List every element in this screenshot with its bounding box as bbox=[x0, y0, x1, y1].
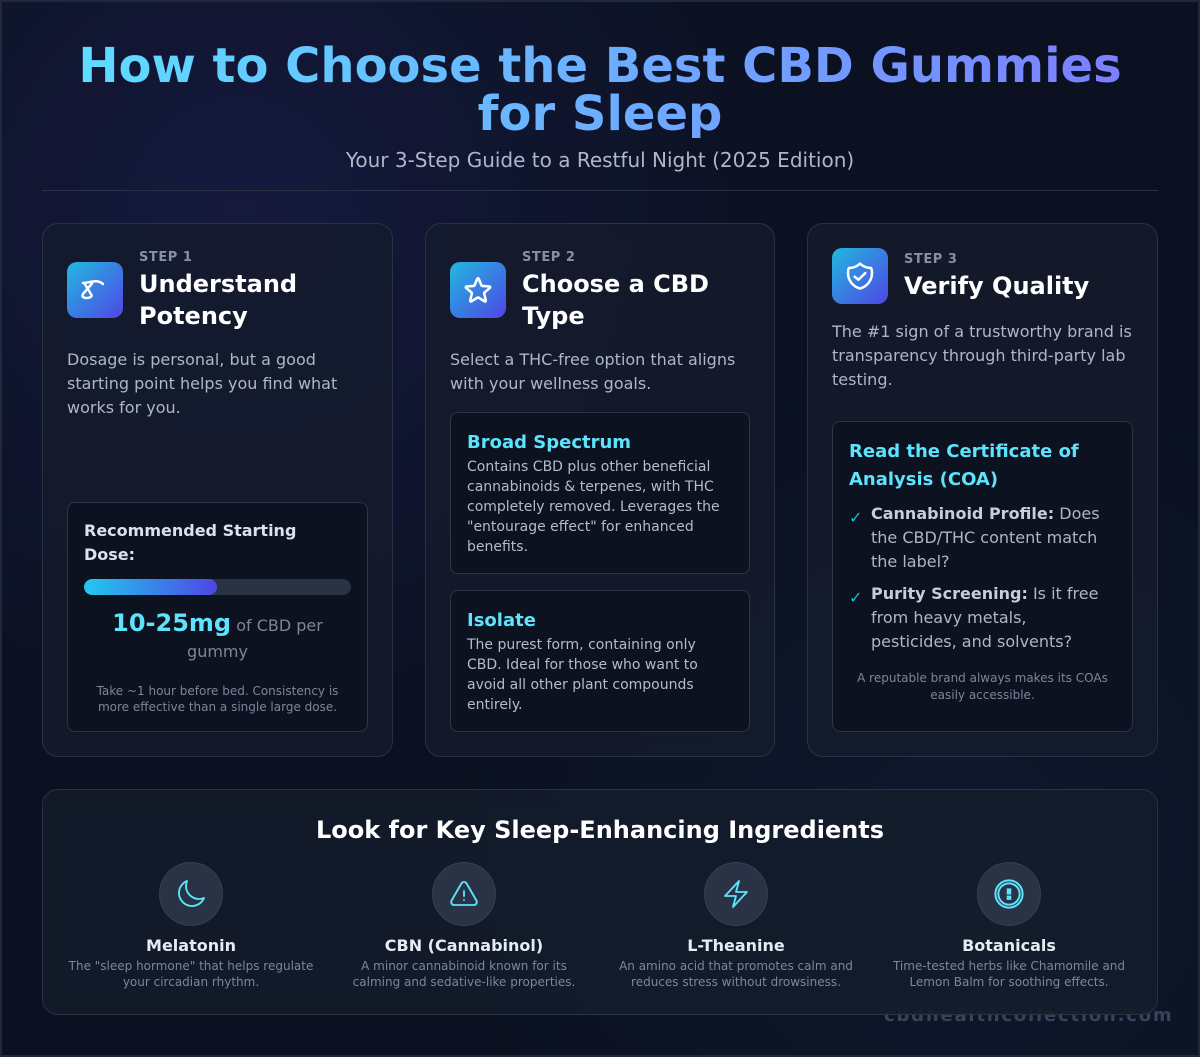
botanicals title: Botanicals bbox=[962, 936, 1056, 955]
CBN text: calming and sedative-like properties. bbox=[353, 975, 575, 989]
dose heading: Recommended Starting bbox=[84, 521, 296, 540]
step 1 description bbox=[67, 350, 337, 417]
step 3 label: STEP 3 bbox=[904, 252, 958, 267]
step 3 description: testing. bbox=[832, 370, 893, 389]
broad spectrum heading: Broad Spectrum bbox=[467, 432, 631, 452]
step 2 heading: Choose a CBD bbox=[522, 270, 709, 298]
icon: warning triangle bbox=[432, 862, 496, 926]
step 2 heading bbox=[522, 270, 709, 330]
checklist item: purity screening: from heavy metals, bbox=[871, 608, 1027, 627]
dose note: Take ~1 hour before bed. Consistency is bbox=[97, 684, 338, 698]
checklist item: cannabinoid profile bbox=[849, 504, 1100, 571]
L-Theanine text bbox=[619, 959, 853, 989]
icon: star bbox=[450, 262, 506, 318]
panel: step 3 bbox=[807, 223, 1158, 757]
checklist item: purity screening bbox=[849, 584, 1098, 651]
COA note bbox=[857, 671, 1108, 702]
COA note: A reputable brand always makes its COAs bbox=[857, 671, 1108, 685]
step 3 description bbox=[832, 322, 1132, 389]
step 1 description: Dosage is personal, but a good bbox=[67, 350, 316, 369]
checklist item: cannabinoid profile: Cannabinoid Profile: Does bbox=[871, 504, 1100, 523]
isolate text bbox=[466, 636, 698, 712]
dose heading bbox=[84, 521, 296, 564]
COA heading: Read the Certificate of bbox=[849, 441, 1079, 462]
melatonin text: your circadian rhythm. bbox=[123, 975, 259, 989]
broad spectrum text bbox=[467, 458, 720, 554]
broad spectrum text: Contains CBD plus other beneficial bbox=[467, 458, 710, 474]
dose note: more effective than a single large dose. bbox=[98, 700, 337, 714]
panel: isolate bbox=[450, 590, 750, 732]
COA note: easily accessible. bbox=[930, 688, 1035, 702]
broad spectrum text: "entourage effect" for enhanced bbox=[467, 518, 694, 534]
title: How to Choose the Best CBD Gummies bbox=[78, 38, 1122, 94]
subtitle: Your 3-Step Guide to a Restful Night (2025 Edition) bbox=[346, 148, 854, 172]
title bbox=[42, 42, 1158, 138]
panel: step 2 bbox=[425, 223, 775, 757]
broad spectrum text: benefits. bbox=[467, 538, 528, 554]
checklist item: cannabinoid profile: ✓ bbox=[849, 508, 862, 527]
dose value: gummy bbox=[187, 642, 248, 661]
step 2 description: Select a THC-free option that aligns bbox=[450, 350, 735, 369]
melatonin text bbox=[68, 959, 313, 989]
icon: dosage bbox=[67, 262, 123, 318]
CBN text: A minor cannabinoid known for its bbox=[361, 959, 567, 973]
step 1 description: starting point helps you find what bbox=[67, 374, 337, 393]
step 3 description: The #1 sign of a trustworthy brand is bbox=[832, 322, 1132, 341]
isolate text: CBD. Ideal for those who want to bbox=[467, 656, 698, 672]
icon: shield bbox=[832, 248, 888, 304]
isolate text: The purest form, containing only bbox=[467, 636, 696, 652]
CBN text bbox=[353, 959, 575, 989]
panel: step 1 bbox=[42, 223, 393, 757]
watermark: cbdhealthcollection.com bbox=[884, 1005, 1173, 1026]
step 3 description: transparency through third-party lab bbox=[832, 346, 1125, 365]
step 1 description: works for you. bbox=[67, 398, 181, 417]
checklist item: cannabinoid profile: the label? bbox=[871, 552, 950, 571]
L-Theanine title: L-Theanine bbox=[687, 936, 785, 955]
dose value bbox=[112, 609, 323, 661]
checklist item: purity screening: Purity Screening: Is it free bbox=[871, 584, 1098, 603]
broad spectrum text: cannabinoids & terpenes, with THC bbox=[467, 478, 714, 494]
step 2 description bbox=[450, 350, 735, 393]
icon: lightning bbox=[704, 862, 768, 926]
step 1 heading bbox=[139, 270, 297, 330]
panel: COA bbox=[832, 421, 1133, 732]
COA heading: Analysis (COA) bbox=[849, 469, 998, 490]
dose value: 10-25mg of CBD per bbox=[112, 609, 323, 637]
botanicals text: Time-tested herbs like Chamomile and bbox=[893, 959, 1125, 973]
isolate text: avoid all other plant compounds bbox=[467, 676, 694, 692]
step 2 description: with your wellness goals. bbox=[450, 374, 651, 393]
L-Theanine text: reduces stress without drowsiness. bbox=[631, 975, 841, 989]
isolate heading: Isolate bbox=[467, 610, 536, 630]
CBN title: CBN (Cannabinol) bbox=[385, 936, 543, 955]
step 1 label: STEP 1 bbox=[139, 250, 193, 265]
step 2 label: STEP 2 bbox=[522, 250, 576, 265]
checklist item: purity screening: ✓ bbox=[849, 588, 862, 607]
panel: broad spectrum bbox=[450, 412, 750, 574]
melatonin text: The "sleep hormone" that helps regulate bbox=[69, 959, 313, 973]
botanicals text bbox=[892, 959, 1125, 989]
title: for Sleep bbox=[478, 86, 722, 142]
step 3 heading: Verify Quality bbox=[904, 272, 1089, 300]
icon: moon bbox=[159, 862, 223, 926]
dose heading: Dose: bbox=[84, 545, 135, 564]
panel: ingredients bbox=[42, 789, 1158, 1015]
L-Theanine text: An amino acid that promotes calm and bbox=[619, 959, 853, 973]
step 2 heading: Type bbox=[522, 302, 585, 330]
botanicals text: Lemon Balm for soothing effects. bbox=[909, 975, 1109, 989]
melatonin title: Melatonin bbox=[146, 936, 236, 955]
step 1 heading: Potency bbox=[139, 302, 248, 330]
panel: recommended dose bbox=[67, 502, 368, 732]
dose note bbox=[96, 684, 338, 714]
icon: botanical badge bbox=[977, 862, 1041, 926]
step 1 heading: Understand bbox=[139, 270, 297, 298]
dose progress bar bbox=[84, 579, 351, 595]
broad spectrum text: completely removed. Leverages the bbox=[467, 498, 720, 514]
checklist item: purity screening: pesticides, and solvents? bbox=[871, 632, 1072, 651]
checklist item: cannabinoid profile: the CBD/THC content match bbox=[871, 528, 1097, 547]
ingredients heading: Look for Key Sleep-Enhancing Ingredients bbox=[316, 816, 884, 844]
isolate text: entirely. bbox=[467, 696, 523, 712]
COA heading bbox=[849, 441, 1079, 490]
